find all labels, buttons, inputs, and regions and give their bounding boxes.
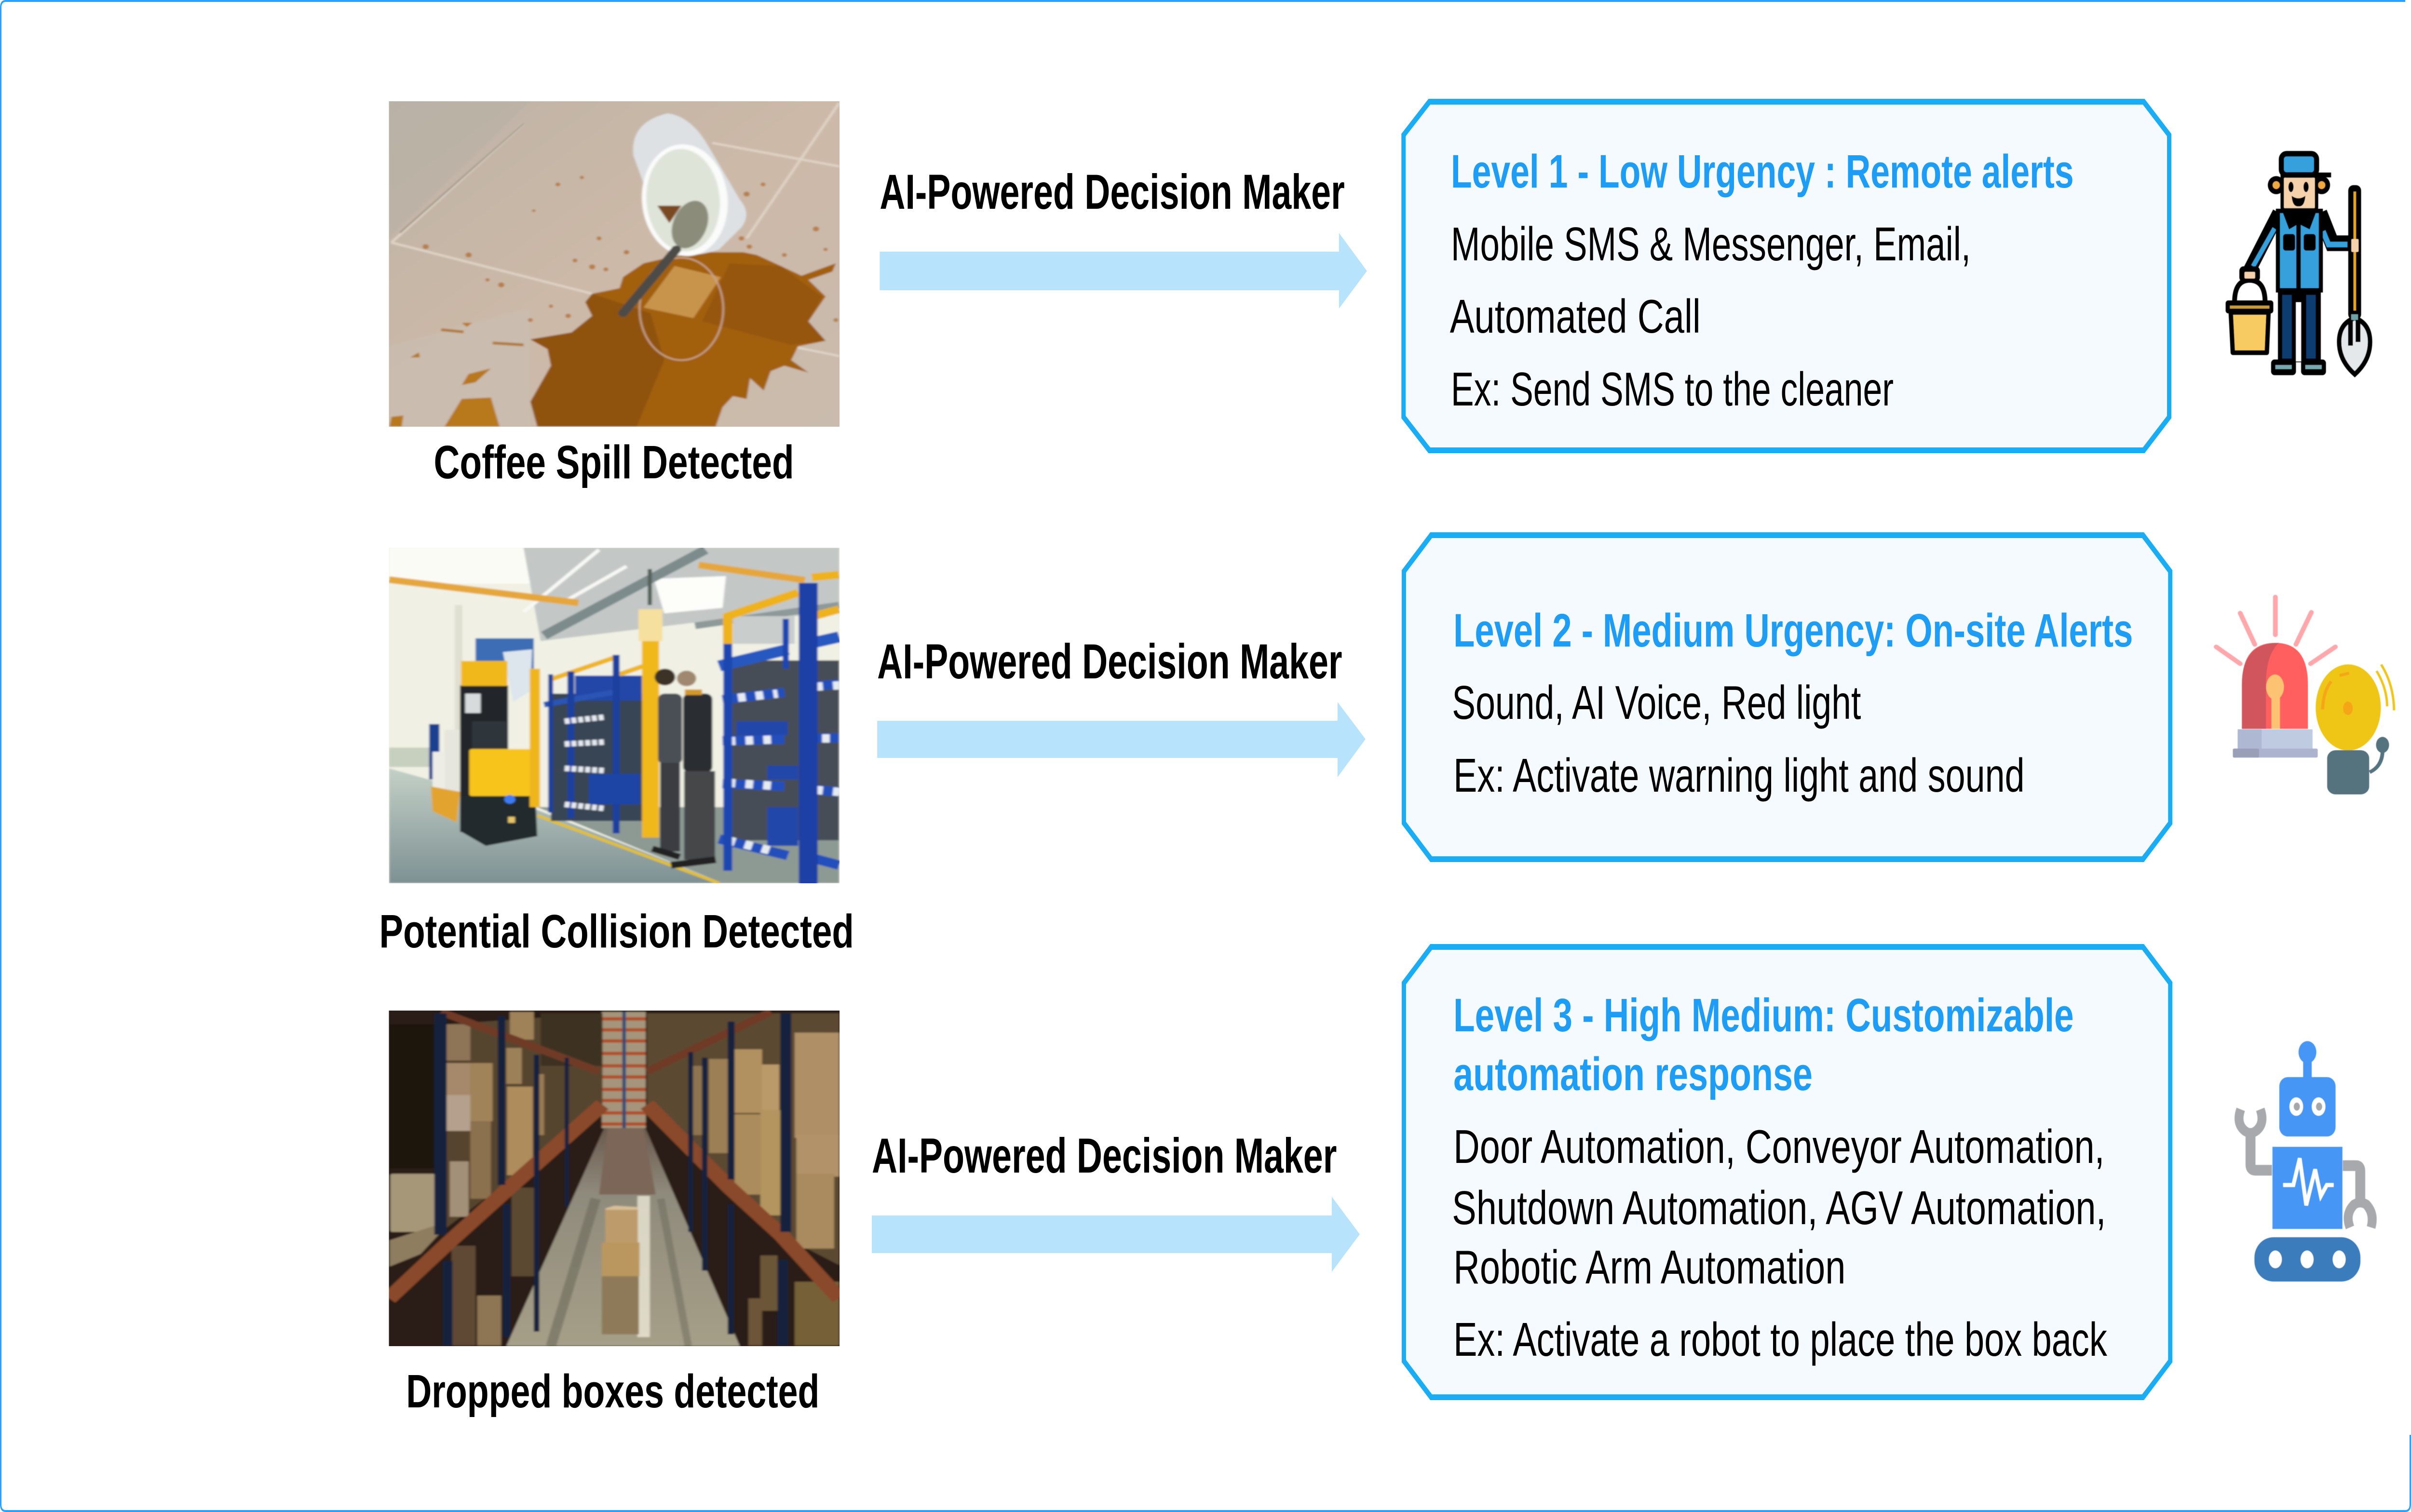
panel: level 1	[1404, 102, 2169, 450]
icon: cleaner	[2226, 154, 2370, 375]
left boxes	[445, 1013, 602, 1229]
panel: level 2	[1404, 535, 2170, 859]
label: decision maker: AI-Powered Decision Maker	[872, 1129, 1337, 1184]
caption: Potential Collision Detected	[379, 906, 854, 958]
uprights	[434, 1013, 791, 1345]
arrow	[872, 1197, 1360, 1272]
level 3 body line 2: Shutdown Automation, AGV Automation,	[1452, 1182, 2106, 1235]
level 2 body: Sound, AI Voice, Red light	[1452, 677, 1861, 729]
floor	[506, 1128, 740, 1346]
middle shelf	[551, 694, 644, 821]
level 1 example: Ex: Send SMS to the cleaner	[1451, 364, 1894, 416]
photo: warehouse aisle	[386, 1009, 843, 1348]
level 3 example: Ex: Activate a robot to place the box back	[1453, 1314, 2107, 1366]
level 2 heading: Level 2 - Medium Urgency: On-site Alerts	[1453, 605, 2133, 657]
right shelves	[731, 661, 840, 840]
center boxes	[602, 1276, 639, 1335]
level 3 heading: Level 3 - High Medium: Customizable	[1453, 990, 2074, 1042]
arrow	[880, 233, 1367, 309]
level 1 heading: Level 1 - Low Urgency : Remote alerts	[1451, 146, 2074, 198]
icon: siren and bell	[2216, 597, 2394, 795]
right boxes	[647, 1013, 840, 1265]
photo: warehouse AGV	[386, 546, 843, 886]
agv	[475, 638, 534, 672]
photo: coffee spill	[386, 100, 843, 429]
caption: Coffee Spill Detected	[434, 437, 794, 489]
label: decision maker: AI-Powered Decision Maker	[877, 634, 1342, 689]
row 1: coffee spill	[386, 100, 2370, 489]
cup	[633, 113, 746, 255]
lower left	[451, 1246, 475, 1345]
panel: level 3	[1404, 947, 2170, 1397]
level 3 body line 3: Robotic Arm Automation	[1453, 1242, 1845, 1294]
level 2 example: Ex: Activate warning light and sound	[1453, 750, 2025, 802]
arrow	[877, 702, 1366, 777]
icon: robot	[2239, 1041, 2372, 1282]
row 3: dropped boxes	[386, 947, 2372, 1418]
label: decision maker: AI-Powered Decision Maker	[880, 165, 1345, 220]
center distance	[602, 1012, 646, 1128]
caption: Dropped boxes detected	[406, 1366, 819, 1418]
shelf beams	[441, 1012, 771, 1071]
row 2: potential collision	[379, 535, 2394, 958]
level 3 body line 1: Door Automation, Conveyor Automation,	[1453, 1121, 2105, 1174]
level 1 body line 2: Automated Call	[1450, 291, 1701, 343]
people	[655, 669, 675, 685]
level 1 body: Mobile SMS & Messenger, Email,	[1451, 218, 1971, 271]
level 3 heading line 2: automation response	[1453, 1049, 1813, 1101]
